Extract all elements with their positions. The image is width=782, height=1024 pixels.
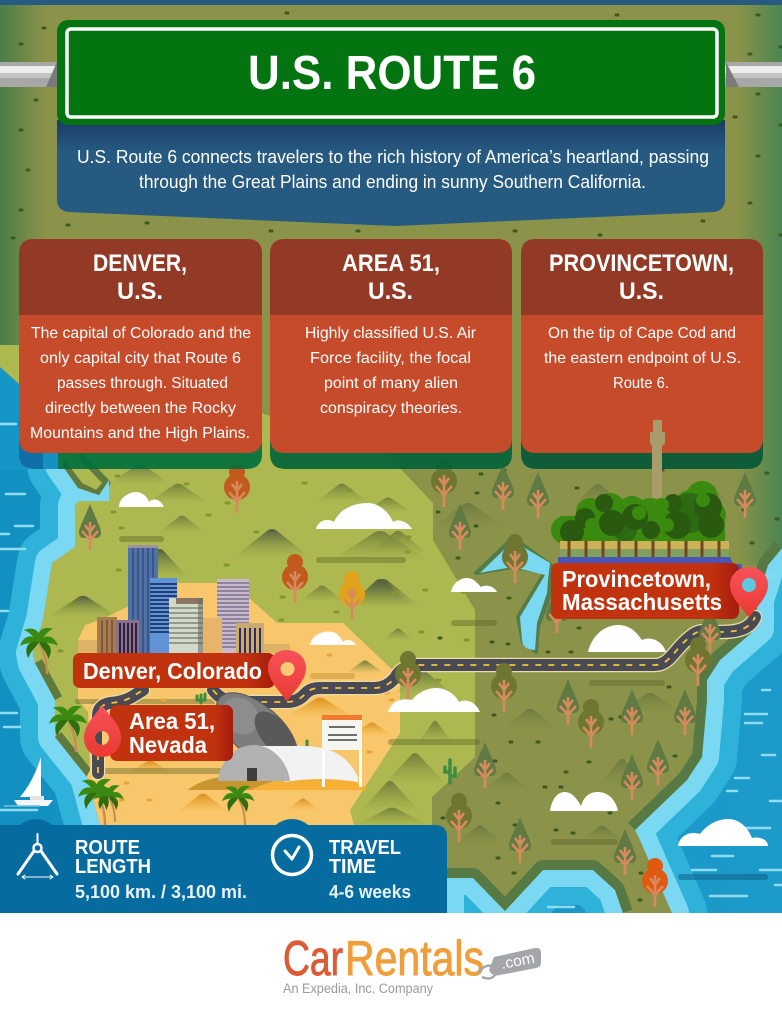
intro panel: [57, 120, 725, 226]
travel time text: 4-6 weeks: [329, 882, 411, 902]
coast dark edge: [447, 548, 782, 913]
hangar and dune: [188, 745, 368, 790]
mountains: darker lime peaks: [47, 529, 422, 618]
map label: Denver: [73, 650, 306, 702]
lime plains region: [0, 345, 475, 830]
monument top over card: [650, 420, 665, 480]
intro text: [77, 147, 709, 192]
intro text: U.S. Route 6 connects travelers to the rich history of America’s heartland, passing: [77, 147, 709, 167]
lime coast edge: [35, 663, 100, 825]
mountains: soft lime peaks: [148, 484, 453, 825]
panel: Provincetown: On the tip of Cape Cod and: [548, 325, 736, 342]
pin: Area 51: [84, 705, 121, 757]
round trees: [224, 458, 711, 907]
map label: Provincetown: [551, 563, 768, 619]
map label: Area 51: [84, 705, 233, 761]
water dashes: [0, 424, 782, 907]
panel: Denver: Mountains and the High Plains.: [30, 425, 250, 442]
purple building: [116, 620, 139, 653]
tall blue tower: [128, 545, 158, 653]
.com tag: .com: [500, 950, 536, 973]
grey striped building: [169, 598, 203, 653]
fence: [560, 541, 729, 558]
cactus icons: [197, 694, 455, 783]
travel time text: TRAVEL: [329, 837, 401, 859]
panel: Denver: U.S.: [117, 278, 163, 305]
title sign: [57, 20, 725, 125]
sailboat: [4, 757, 53, 806]
panel: Area 51: AREA 51,: [342, 250, 440, 277]
panel: Area 51: [270, 239, 512, 469]
brown building: [97, 617, 117, 653]
river: [476, 538, 552, 652]
map label: Denver: Denver, Colorado: [83, 658, 262, 684]
map label: Provincetown: Provincetown,: [562, 566, 711, 592]
map label: Area 51: Area 51,: [129, 708, 215, 734]
Denver skyline: [78, 545, 290, 653]
panel: Denver: The capital of Colorado and the: [31, 325, 251, 342]
deep water under first card: [0, 350, 40, 470]
footer: [0, 913, 782, 1024]
.com tag: [478, 948, 541, 978]
map label: Provincetown: Massachusetts: [562, 589, 722, 615]
title: U.S. ROUTE 6: [248, 47, 536, 100]
travel time text: TIME: [329, 856, 376, 878]
panel: Area 51: conspiracy theories.: [320, 400, 462, 417]
sign posts: [0, 62, 782, 87]
panel: Area 51: Highly classified U.S. Air: [305, 325, 477, 342]
logo: CarRentals.com: Car: [283, 932, 343, 986]
pin: Denver: [268, 650, 306, 702]
panel: Area 51: Force facility, the focal: [310, 350, 471, 367]
route length text: LENGTH: [75, 856, 151, 878]
panel: Provincetown: Route 6.: [613, 375, 669, 392]
tagline: An Expedia, Inc. Company: [283, 981, 433, 996]
panel: Denver: only capital city that Route 6: [40, 350, 241, 367]
logo: CarRentals.com: [283, 932, 541, 996]
inlet spit edge: [64, 469, 110, 495]
lavender tower: [217, 579, 249, 653]
road: [98, 617, 755, 773]
route length text: 5,100 km. / 3,100 mi.: [75, 882, 247, 902]
panel: Denver: DENVER,: [93, 250, 187, 277]
travel time text: [329, 837, 411, 902]
tan ground blocks: [78, 640, 290, 653]
route length text: ROUTE: [75, 837, 140, 859]
mountains: forest peaks: [110, 464, 733, 844]
panel: Denver: directly between the Rocky: [45, 400, 236, 417]
clouds: [119, 492, 768, 846]
low striped building: [236, 623, 264, 653]
desert sand region: [78, 583, 400, 830]
blue base strip: [558, 557, 743, 572]
panel: route stats: [0, 819, 447, 913]
ground shadows: [75, 536, 665, 845]
trees: [79, 458, 756, 907]
Provincetown monument and park: [551, 420, 743, 572]
icon: compass: [18, 834, 57, 879]
icon: clock: [272, 836, 312, 874]
panel: Denver: passes through. Situated: [57, 375, 228, 392]
conifer trees: [79, 464, 756, 875]
bushes: [551, 481, 726, 544]
top strip: [0, 0, 782, 5]
monument tower: [650, 420, 665, 498]
palm trees: [20, 623, 254, 825]
panel: Provincetown: PROVINCETOWN,: [549, 250, 734, 277]
panel: Provincetown: U.S.: [619, 278, 664, 305]
map label: Area 51: Nevada: [129, 732, 207, 758]
panel: Denver: [19, 239, 262, 469]
pin: Provincetown: [730, 567, 768, 618]
blue striped tower: [150, 578, 177, 653]
UFO crashed saucer: [203, 679, 311, 783]
panel: Provincetown: [521, 239, 763, 469]
tan block: [200, 618, 222, 653]
logo: CarRentals.com: Rentals: [345, 932, 484, 986]
route length text: [75, 837, 247, 902]
panel: Area 51: U.S.: [368, 278, 413, 305]
intro text: through the Great Plains and ending in sunny Southern California.: [139, 172, 646, 192]
panel: Provincetown: the eastern endpoint of U.S.: [544, 350, 741, 367]
mountains: desert dunes: [124, 698, 394, 814]
dark cloud reflection: [678, 874, 768, 880]
panel: Area 51: point of many alien: [324, 375, 458, 392]
billboard: [322, 715, 362, 787]
